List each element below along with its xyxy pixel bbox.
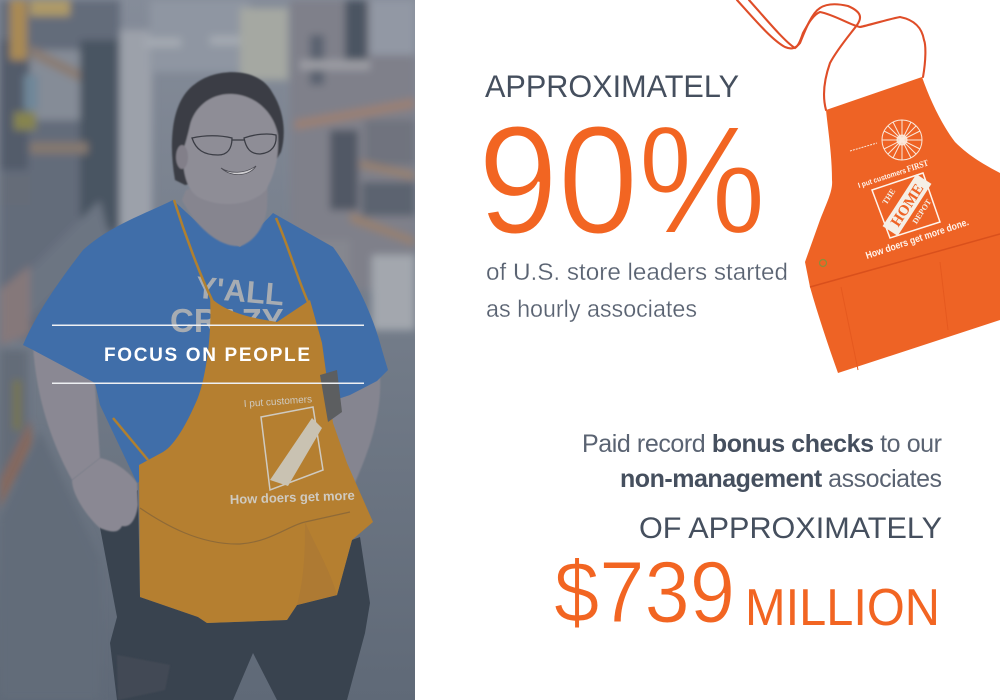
description: bonus checks: Paid record bonus checks to our (582, 430, 942, 458)
panel: photo of associate (0, 0, 415, 700)
apron pocket line (140, 508, 350, 544)
label: approximately: APPROXIMATELY (485, 68, 739, 104)
right arm (332, 378, 380, 482)
apron logo wordmark: THE (881, 187, 897, 206)
left arm (33, 345, 100, 480)
stat: bonus checks (554, 430, 942, 641)
apron body (805, 77, 1000, 373)
name badge (320, 370, 342, 422)
description: store leaders: of U.S. store leaders started (486, 259, 788, 286)
store aisle background (0, 0, 415, 510)
section label: focus on people: FOCUS ON PEOPLE (104, 345, 310, 366)
description: bonus checks: non-management associates (620, 465, 942, 493)
hand (72, 458, 138, 532)
description: bonus checks (582, 430, 942, 493)
shirt print: Y'ALL (195, 270, 286, 312)
value: 739 dollars: $739 (554, 544, 735, 641)
apron on associate (139, 297, 373, 623)
shirt (23, 200, 388, 483)
floor (8, 439, 70, 512)
shorts (98, 490, 370, 700)
apron logo: How doers get more (230, 488, 355, 507)
shirt print second line: CRAZY (170, 302, 284, 339)
description: store leaders: as hourly associates (486, 296, 697, 323)
glasses (192, 134, 276, 155)
apron wheel logo (882, 120, 922, 160)
apron fold shadow (298, 595, 337, 605)
description: store leaders (486, 259, 788, 323)
value unit: million: MILLION (745, 579, 940, 637)
apron logo (230, 394, 355, 507)
apron logo band (883, 174, 931, 236)
apron logo box (872, 173, 940, 238)
apron logo wordmark: DEPOT (911, 197, 934, 226)
cargo pocket (117, 655, 170, 700)
icon: orange apron (737, 0, 1000, 373)
apron logo: I put customers (243, 394, 312, 410)
apron first: FIRST (906, 158, 930, 174)
apron tagline: I put customers (857, 166, 907, 190)
smile (221, 166, 256, 175)
apron name line (850, 143, 877, 151)
apron slogan: How doers get more done. (864, 217, 971, 262)
apron ring (820, 260, 826, 266)
label: of approximately: OF APPROXIMATELY (639, 512, 942, 545)
apron neck straps (737, 0, 925, 110)
apron pocket seam (810, 234, 1000, 287)
apron logo wordmark: HOME (888, 181, 927, 230)
stat: 90 percent (478, 68, 788, 323)
apron straps (113, 200, 308, 460)
neck and head (172, 72, 284, 246)
value: 90%: 90% (478, 94, 766, 266)
apron pocket folds (841, 262, 948, 370)
